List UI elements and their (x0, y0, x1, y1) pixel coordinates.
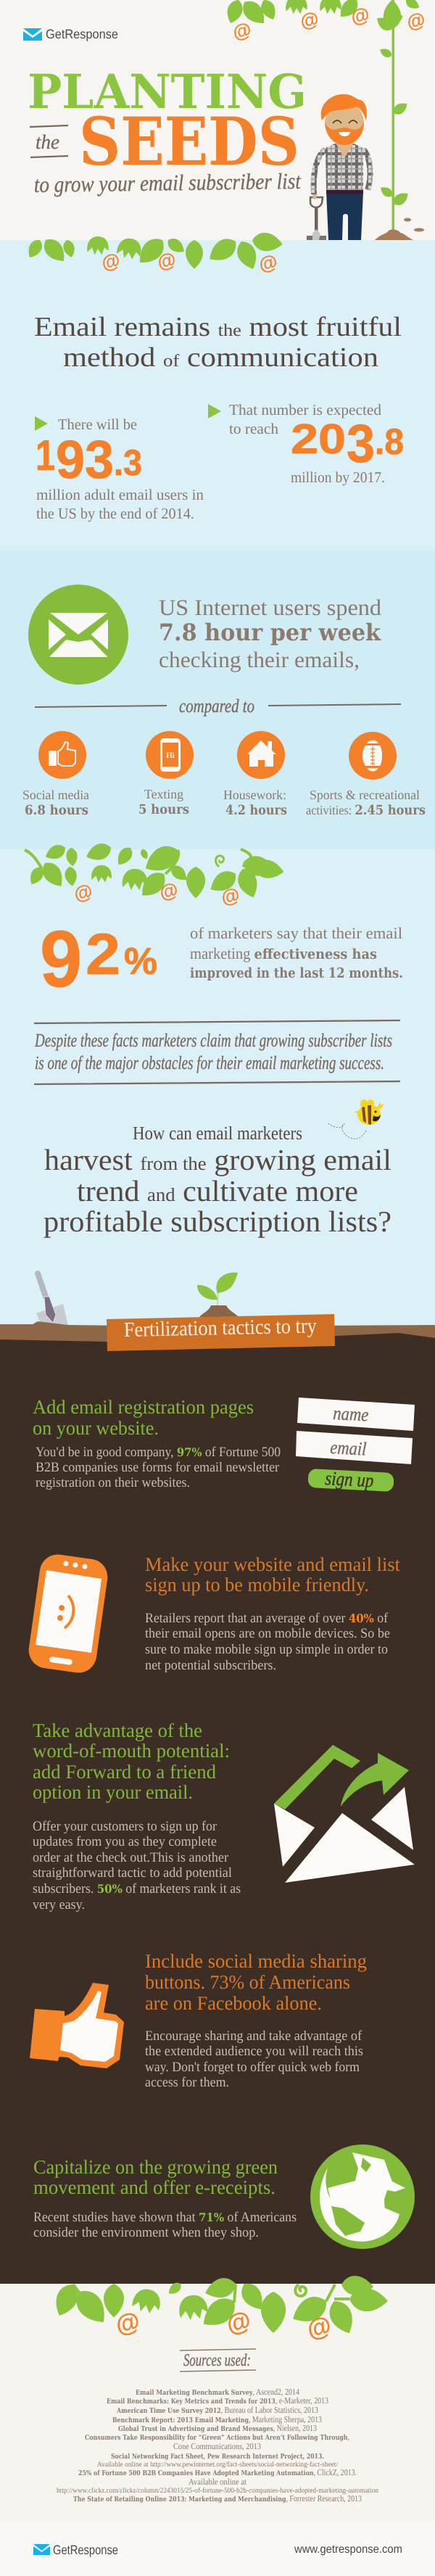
stat: 193.3 million: 93 (56, 429, 114, 490)
tactic 4: social sharing: Include social media sharing (145, 1950, 367, 1972)
label: texting: 5 hours (138, 802, 189, 817)
sources list: The State of Retailing Online 2013: Marketing and Merchandising, Forrester Research, 2013 (73, 2493, 362, 2503)
vine leaves (50, 2274, 389, 2338)
heading: Email remains the most fruitful (34, 312, 402, 342)
stat: 203.8 million (208, 401, 404, 486)
tactic 1: registration pages: registration on their websites. (36, 1475, 190, 1490)
tactic 4: social sharing: access for them. (145, 2075, 229, 2090)
tactic 3: word of mouth: subscribers. 50% of marketers rank it as (33, 1881, 241, 1896)
title: the (36, 131, 59, 154)
at signs: @ (223, 2306, 254, 2339)
at signs (112, 2306, 334, 2344)
title: SEEDS (79, 104, 299, 181)
tactic 2: mobile friendly: Retailers report that an average of over 40% of (145, 1611, 389, 1626)
at signs: @ (405, 8, 428, 33)
sources list: 25% of Fortune 500 B2B Companies Have Adopted Marketing Automation, ClickZ, 2013. (78, 2467, 357, 2477)
vine leaves (25, 841, 286, 902)
stat: 203.8 million: million by 2017. (291, 468, 385, 486)
tactic 1: registration pages: B2B companies use forms for email newsletter (36, 1460, 280, 1475)
icon: house (237, 731, 285, 779)
stat: 193.3 million: There will be (58, 416, 137, 433)
arms (314, 149, 370, 194)
text: effectiveness: improved in the last 12 months. (190, 965, 403, 981)
stat: 203.8 million: 3 (347, 413, 375, 474)
icon: forward envelope (274, 1745, 415, 1883)
sources list: Benchmark Report: 2013 Email Marketing, Marketing Sherpa, 2013 (112, 2414, 322, 2424)
tactic 3: word of mouth: Offer your customers to sign up for (33, 1819, 218, 1834)
tactic 1: registration pages: You'd be in good company, 97% of Fortune 500 (36, 1445, 281, 1460)
sources list: Cone Communications, 2013 (173, 2441, 261, 2451)
headline: hours per week: US Internet users spend (159, 595, 382, 620)
label: housework: 4.2 hours (225, 803, 287, 818)
text: effectiveness (190, 924, 403, 981)
at signs: @ (304, 2311, 334, 2344)
stat: 193.3 million: .3 (114, 442, 142, 483)
heading: method of communication (63, 342, 378, 373)
panel: marketers (0, 841, 435, 1332)
sources list: Available online at (188, 2477, 247, 2487)
tactic 1: registration pages: on your website. (33, 1417, 159, 1439)
tactic 4: social sharing: the extended audience you will reach this (145, 2044, 363, 2059)
stat: 92% (40, 915, 157, 1004)
label: sports (306, 788, 426, 818)
shovel (307, 192, 326, 240)
icon: texting phone (146, 731, 194, 779)
vine leaves (25, 231, 283, 273)
tactic 5: e-receipts: Recent studies have shown that 71% of Americans (33, 2210, 297, 2225)
sources heading (180, 2349, 256, 2371)
icon: sprout (197, 1273, 239, 1317)
at signs: @ (298, 7, 321, 33)
panel: time spent (0, 550, 435, 849)
icon: texting phone: Hi (166, 751, 175, 760)
sources list: Available online at http://www.pewinternet.org/fact-sheets/social-networking-fact-sheet/ (97, 2461, 338, 2469)
tactic 5: e-receipts: Capitalize on the growing green (33, 2156, 278, 2178)
tactic 3: word of mouth: order at the check out.This is another (33, 1850, 229, 1865)
at signs: @ (157, 878, 181, 904)
farmer character (307, 94, 370, 240)
shirt (326, 144, 363, 190)
icon: social media thumb (38, 731, 86, 779)
tactic 4: social sharing: buttons. 73% of Americans (145, 1971, 350, 1993)
top vine leaves (223, 0, 362, 29)
panel: header (0, 0, 435, 240)
label: social media: 6.8 hours (25, 803, 88, 818)
headline: hours per week: checking their emails, (159, 647, 360, 672)
logo: GetResponse footer (33, 2543, 118, 2557)
signup form: sign up (325, 1467, 374, 1491)
stat: 92%: % (124, 941, 157, 983)
tactic 3: word of mouth: Take advantage of the (33, 1720, 202, 1741)
tactic 4: social sharing: way. Don't forget to offer quick web form (145, 2060, 360, 2075)
icon: mobile phone (26, 1552, 110, 1675)
at signs: @ (72, 880, 95, 905)
stat: 203.8 million: 20 (291, 416, 346, 463)
at signs (99, 248, 280, 276)
sources list (57, 2387, 378, 2503)
sources list: Global Trust in Advertising and Brand Messages, Nielsen, 2013 (118, 2423, 317, 2433)
sources list: Consumers Take Responsibility for “Green” Actions but Aren’t Following Through, (85, 2432, 349, 2442)
tactic 2: mobile friendly: their email opens are on mobile devices. So be (145, 1626, 390, 1641)
at signs (231, 3, 428, 44)
at signs: @ (231, 18, 254, 44)
text: effectiveness: marketing effectiveness has (190, 944, 377, 962)
sources list: American Time Use Survey 2012, Bureau of Labor Statistics, 2013 (116, 2405, 318, 2415)
stat: 203.8 million: That number is expected (229, 401, 381, 418)
label: texting (138, 787, 189, 817)
tactic 5: e-receipts: movement and offer e-receipts. (33, 2176, 276, 2198)
question heading: trend and cultivate more (77, 1174, 358, 1208)
label: social media: Social media (22, 788, 89, 802)
icon: trowel (36, 1273, 68, 1332)
icon: football (349, 732, 397, 780)
panel: footer (0, 2522, 435, 2576)
at signs: @ (155, 248, 178, 273)
at signs (72, 878, 242, 909)
sources heading: Sources used: (183, 2351, 251, 2370)
belt (326, 190, 363, 194)
banner: fertilization tactics: Fertilization tactics to try (123, 1314, 318, 1342)
signup form: name (333, 1403, 369, 1426)
headline: hours per week (159, 595, 382, 672)
stat: 193.3 million: million adult email users in (36, 486, 204, 503)
label: housework (223, 788, 287, 818)
logo: GetResponse footer: GetResponse (53, 2543, 118, 2557)
tactic 5: e-receipts: consider the environment when they shop. (33, 2225, 259, 2240)
compared to divider: compared to (179, 695, 254, 717)
title (28, 65, 307, 197)
tactic 2: mobile friendly: Make your website and email list (145, 1553, 400, 1575)
neck (336, 143, 354, 158)
tactic 2: mobile friendly (145, 1553, 400, 1673)
tactic 2: mobile friendly: sign up to be mobile friendly. (145, 1574, 369, 1595)
tactic 2: mobile friendly: sure to make mobile sign up simple in order to (145, 1642, 388, 1657)
tactic 1: registration pages: Add email registration pages (33, 1396, 254, 1418)
sources list: Email Benchmarks: Key Metrics and Trends for 2013, e-Marketer, 2013 (107, 2395, 328, 2406)
title: PLANTING (28, 65, 307, 120)
stat: 203.8 million: .8 (375, 421, 404, 462)
signup form (296, 1398, 415, 1492)
signup form: email (330, 1437, 367, 1460)
smile (339, 132, 350, 136)
tactic 5: e-receipts (33, 2156, 297, 2240)
sources list: Email Marketing Benchmark Survey, Ascend2, 2014 (136, 2387, 299, 2397)
panel: email stats (0, 231, 435, 550)
callout: obstacles (34, 1020, 400, 1084)
question heading (44, 1123, 392, 1238)
sources list: http://www.clickz.com/clickz/column/2243015/25-of-fortune-500-b2b-companies-have-adopted-marketing-automation (57, 2487, 378, 2495)
face (325, 102, 364, 145)
at signs: @ (99, 249, 123, 274)
panel: sources (0, 2274, 435, 2522)
legs (326, 191, 363, 240)
tactic 3: word of mouth: add Forward to a friend (33, 1761, 216, 1783)
label: sports: Sports & recreational (310, 788, 420, 802)
label: texting: Texting (144, 787, 183, 801)
question heading: How can email marketers (133, 1123, 302, 1144)
at signs: @ (349, 3, 372, 28)
tactic 4: social sharing: Encourage sharing and take advantage of (145, 2028, 362, 2044)
at signs: @ (257, 250, 280, 276)
at signs: @ (112, 2307, 143, 2340)
eyes (333, 120, 357, 123)
icon: thumbs up (30, 1983, 124, 2068)
beard (325, 122, 364, 145)
icon: envelope (28, 585, 128, 685)
title: to grow your email subscriber list (34, 168, 302, 197)
plant (374, 0, 424, 240)
sources list: Social Networking Fact Sheet, Pew Research Internet Project, 2013. (111, 2453, 324, 2461)
tactic 3: word of mouth (33, 1720, 241, 1912)
tactic 1: registration pages (33, 1396, 281, 1490)
stat: 92%: 9 (40, 915, 82, 1004)
logo: GetResponse: GetResponse (46, 27, 118, 41)
compared to divider (35, 695, 401, 717)
stat: 193.3 million: 1 (36, 432, 55, 479)
stat: 92%: 2 (86, 922, 120, 986)
hair (321, 94, 367, 120)
tactic 3: word of mouth: word-of-mouth potential: (33, 1740, 230, 1762)
tactic 4: social sharing (145, 1950, 367, 2090)
label: housework: Housework: (223, 788, 286, 802)
tactic 3: word of mouth: option in your email. (33, 1781, 193, 1803)
question heading: profitable subscription lists? (44, 1205, 392, 1238)
panel: soil tactics (0, 1314, 435, 2284)
label: sports: activities: 2.45 hours (306, 803, 426, 818)
tactic 4: social sharing: are on Facebook alone. (145, 1992, 322, 2014)
label: social media (22, 788, 89, 818)
question heading: harvest from the growing email (44, 1143, 392, 1176)
tactic 3: word of mouth: very easy. (33, 1897, 85, 1912)
at signs: @ (219, 883, 242, 909)
icon: globe (310, 2144, 415, 2249)
tactic 3: word of mouth: updates from you as they complete (33, 1834, 217, 1849)
banner: fertilization tactics (107, 1314, 335, 1351)
website url: www.getresponse.com (294, 2543, 402, 2556)
headline: hours per week: 7.8 hour per week (159, 619, 381, 646)
stat: 193.3 million: the US by the end of 2014. (36, 505, 194, 522)
tactic 2: mobile friendly: net potential subscribers. (145, 1658, 276, 1673)
icon: bee (328, 1099, 384, 1139)
text: effectiveness: of marketers say that their email (190, 924, 402, 942)
stat: 203.8 million: to reach (229, 420, 279, 437)
heading (34, 312, 402, 373)
stat: 193.3 million (35, 416, 204, 522)
tactic 3: word of mouth: straightforward tactic to add potential (33, 1865, 232, 1881)
